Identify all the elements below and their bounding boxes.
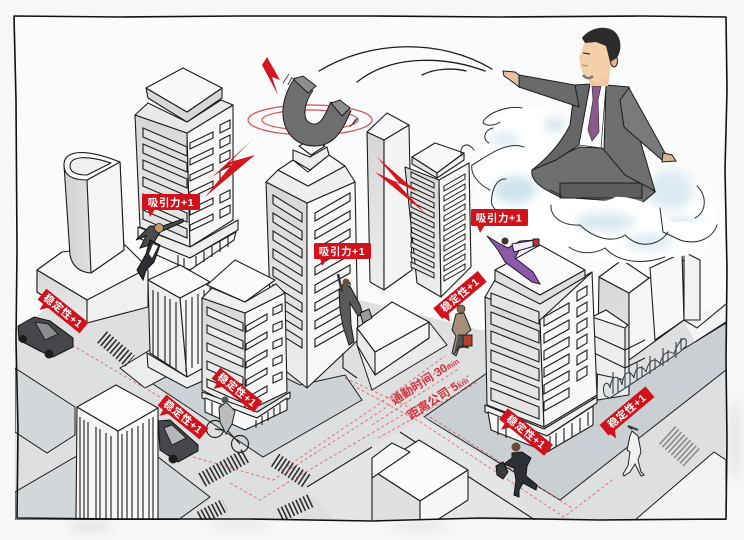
callout: attraction +1 left tower [142,194,200,217]
neck and face [588,70,610,86]
cloud rear [491,114,701,257]
panel: street ground [15,300,726,520]
left lower sidewalk [15,368,75,453]
eyes and goatee [583,53,590,54]
callout: stability +1 right walker: 稳定性+1 [605,391,649,431]
route label: distance to company: 距离公司 5km [404,372,471,422]
shirt [579,85,606,148]
right sidewalk block [424,323,726,500]
dashed commute route [72,345,615,517]
callout: stability +1 cyclist: 稳定性+1 [215,370,259,410]
building: office tower front left [202,260,290,430]
icon: red bolt at right tower [375,157,425,213]
building: lower left striped tower [76,385,158,520]
callout: attraction +1 left tower: 吸引力+1 [148,196,194,209]
cyclist [206,396,248,452]
lower right block [635,452,726,520]
running businessman [496,442,537,497]
building: left tall office tower [135,68,238,270]
other arm [620,88,665,160]
motion arcs of hand gesture [319,47,492,82]
walker with red bag [452,305,472,356]
route label: commute time: 通勤时间 30min [388,352,462,408]
pants and crossed legs [532,147,655,203]
hedge sketch [603,339,686,398]
magnet energy rings [248,105,372,135]
callout: stability +1 left car [33,289,88,339]
building: rear slab tower [367,113,412,290]
ear [610,55,618,67]
callout: attraction +1 woman [471,209,528,233]
raised arm [519,75,579,107]
central sidewalk block [152,374,363,458]
icon: horseshoe magnet [283,74,358,135]
building: striped tower behind [405,143,471,297]
upper right road plate [357,322,447,390]
panel: paper smudges under frame [68,400,739,530]
walking man right [623,426,644,476]
hands [503,71,519,87]
callout: attraction +1 woman: 吸引力+1 [476,212,522,224]
callout: stability +1 runner [495,408,553,461]
callout: attraction +1 central tower: 吸引力+1 [319,245,365,258]
icon: red bolt from left tower [205,140,255,197]
jacket [532,84,590,170]
callout: attraction +1 central tower [314,243,371,266]
purple tie [588,86,601,141]
crosswalks [102,337,692,518]
businessman with telescope [136,219,183,280]
icon: red bolt above magnet [262,57,280,95]
building: lower middle white block [372,440,468,522]
callout: stability +1 lower car [153,395,208,445]
callout: stability +1 cyclist [207,368,262,418]
small courtyard [119,350,166,389]
man on cloud [503,28,676,203]
building: large right tower [485,245,597,452]
flying woman in purple [487,236,540,284]
callout: stability +1 runner: 稳定性+1 [504,412,548,452]
building: central magnet tower [266,140,358,388]
building: cylinder with plinth [37,153,148,323]
building: vertical-stripe block [147,265,210,388]
cloud front [538,197,717,263]
callout: stability +1 walker with bag [433,271,491,324]
car: lower road [158,420,198,464]
lower middle sidewalk [424,417,434,424]
climbing businessman with briefcase [338,274,372,345]
building: low white block [343,302,429,378]
building: rear right boxes and hedge [592,252,726,400]
callout: stability +1 right walker [600,386,659,441]
car: left road [18,317,73,358]
callout: stability +1 left car: 稳定性+1 [41,291,85,331]
hair [582,28,620,62]
cloud outlines [461,107,717,261]
callout: stability +1 lower car: 稳定性+1 [161,397,205,437]
upper right white plate [684,320,726,342]
callout: stability +1 walker with bag: 稳定性+1 [438,275,482,315]
